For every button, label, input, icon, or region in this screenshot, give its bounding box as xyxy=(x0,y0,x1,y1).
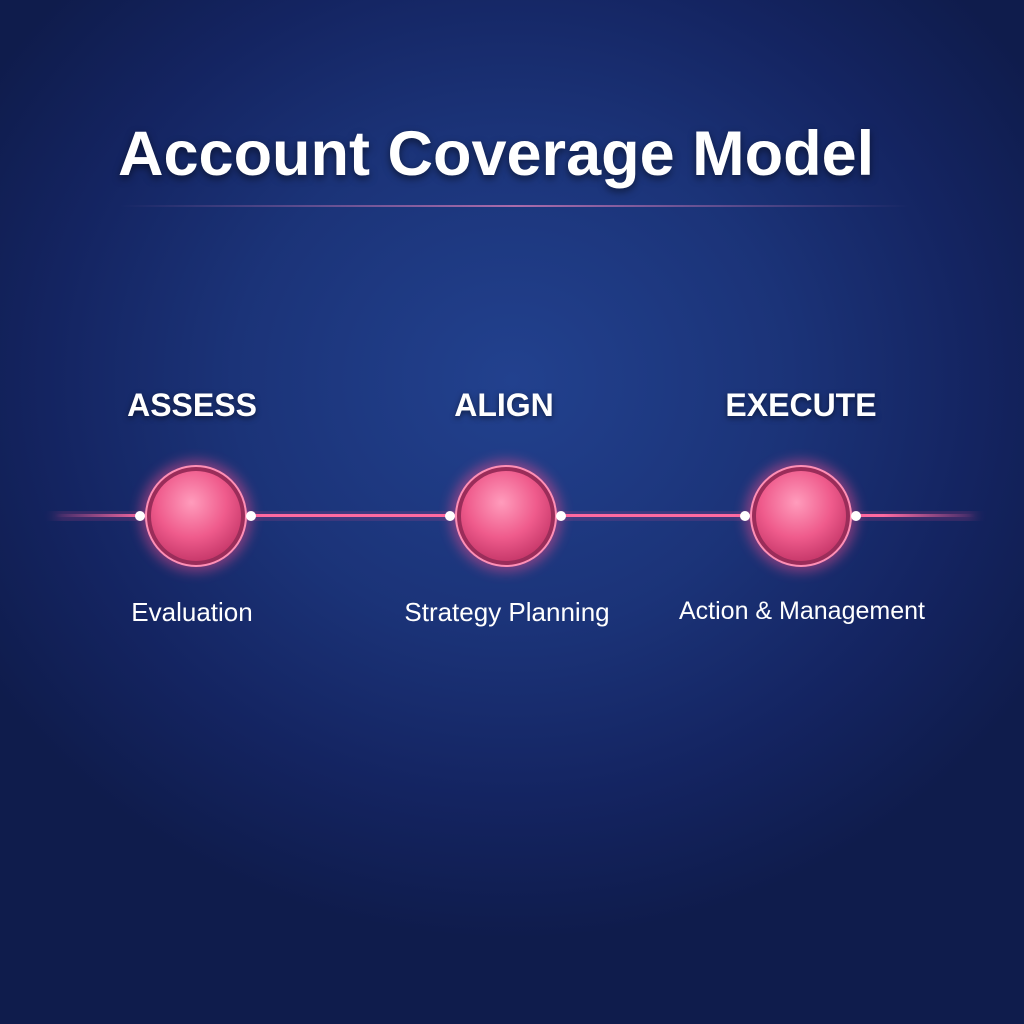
node: align xyxy=(445,460,566,572)
label: ASSESS: ASSESS xyxy=(127,387,257,423)
connector line xyxy=(55,512,975,520)
label: EXECUTE: EXECUTE xyxy=(725,387,877,423)
label: ALIGN: ALIGN xyxy=(454,387,554,423)
sub: Evaluation: Evaluation xyxy=(131,597,253,627)
node: assess xyxy=(135,460,256,572)
title: Account Coverage Model xyxy=(118,119,874,189)
sub: Strategy Planning: Strategy Planning xyxy=(404,597,610,627)
sub: Action & Management: Action & Management xyxy=(679,597,925,625)
title underline xyxy=(120,205,910,207)
node: execute xyxy=(740,460,861,572)
